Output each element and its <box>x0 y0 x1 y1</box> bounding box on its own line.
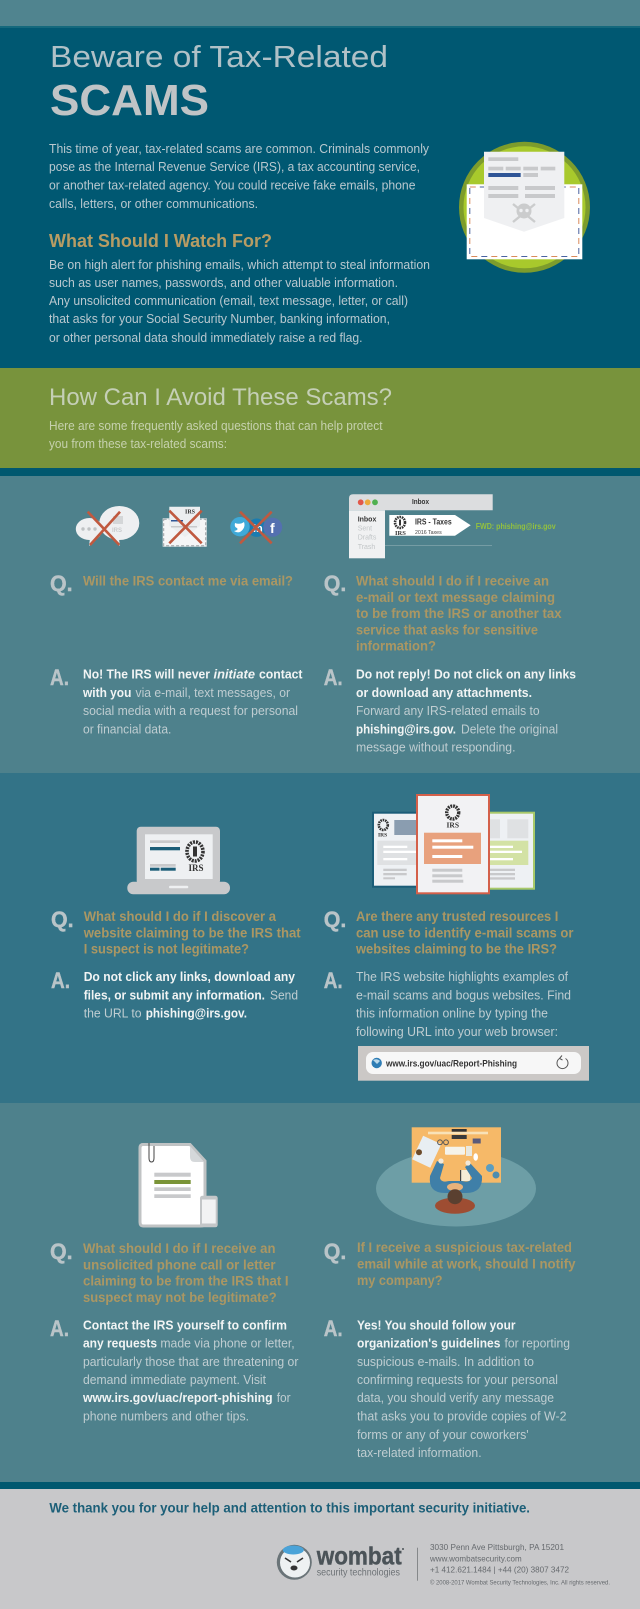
answer 6 <box>357 1318 570 1460</box>
icon: envelope with skull letter <box>459 142 590 273</box>
heading: what should I watch for: What Should I Watch For? <box>49 231 272 251</box>
icon: inbox window: Trash <box>358 544 375 551</box>
answer 1: No! The IRS will never <box>83 668 210 682</box>
answer 3: Do not click any links, download any <box>84 970 295 984</box>
panel: how can I avoid <box>0 368 640 468</box>
question 5: claiming to be from the IRS that I <box>83 1274 289 1288</box>
subheading text: you from these tax-related scams: <box>49 437 227 451</box>
icon: three website documents: IRS <box>378 833 387 839</box>
icon: crossed-out speech bubbles <box>76 506 139 546</box>
panel: footer <box>0 1489 640 1609</box>
icon: crossed-out envelope: IRS <box>185 510 196 516</box>
dark divider band <box>0 468 640 476</box>
answer 6: Yes! You should follow your <box>357 1318 516 1332</box>
answer mark 4: A. <box>324 968 343 993</box>
title <box>50 39 388 125</box>
question 2: What should I do if I receive an <box>356 574 549 588</box>
question 4: can use to identify e-mail scams or <box>356 926 574 940</box>
contact details: +1 412.621.1484 | +44 (20) 3807 3472 <box>430 1565 569 1575</box>
answer 1: via e-mail, text messages, or <box>136 686 290 700</box>
icon: document with paperclip and phone <box>140 1143 218 1227</box>
icon: inbox window: Inbox <box>412 497 430 506</box>
question 4: websites claiming to be the IRS? <box>355 942 557 956</box>
answer 3: Send <box>270 988 298 1002</box>
subheading text <box>49 419 383 451</box>
watch-for text: such as user names, passwords, and other valuable information. <box>49 276 398 290</box>
question 2: information? <box>356 638 436 654</box>
contact details: www.wombatsecurity.com <box>429 1553 522 1563</box>
dark divider band <box>0 1482 640 1489</box>
watch-for text: or other personal data should immediately raise a red flag. <box>49 331 362 345</box>
question 1: Will the IRS contact me via email? <box>83 574 293 588</box>
question 5: What should I do if I receive an <box>83 1241 276 1256</box>
intro text: pose as the Internal Revenue Service (IRS), a tax accounting service, <box>49 160 420 174</box>
icon: crossed-out social media <box>230 512 282 543</box>
question mark 3: Q. <box>51 907 74 932</box>
answer 3: phishing@irs.gov. <box>146 1006 247 1020</box>
watch-for text: that asks for your Social Security Number, banking information, <box>49 312 390 326</box>
answer 5: made via phone or letter, <box>160 1336 295 1350</box>
answer mark 6: A. <box>324 1316 343 1341</box>
icon: person working at desk <box>376 1127 536 1226</box>
watch-for text <box>49 258 430 345</box>
question 6: If I receive a suspicious tax-related <box>357 1240 572 1255</box>
top band <box>0 0 640 26</box>
icon: three website documents: IRS <box>446 821 459 830</box>
answer 4: following URL into your web browser: <box>356 1025 558 1039</box>
icon: inbox window: Sent <box>358 526 372 532</box>
answer 1: contact <box>259 668 303 682</box>
question mark 1: Q. <box>50 571 73 596</box>
title: Beware of Tax-Related <box>50 39 388 74</box>
icon: inbox window: Inbox <box>358 516 376 524</box>
answer 5: particularly those that are threatening or <box>83 1355 298 1369</box>
answer 4 <box>356 970 571 1039</box>
intro text: calls, letters, or other communications. <box>49 197 258 211</box>
question 5: suspect may not be legitimate? <box>83 1290 277 1305</box>
intro text: or another tax-related agency. You could receive fake emails, phone <box>49 178 416 192</box>
question mark 6: Q. <box>324 1239 346 1264</box>
answer 6: suspicious e-mails. In addition to <box>357 1355 534 1369</box>
icon: crossed-out social media: in <box>253 523 263 535</box>
question 5: unsolicited phone call or letter <box>83 1258 276 1272</box>
heading: how can I avoid these scams: How Can I Avoid These Scams? <box>49 384 392 411</box>
icon: laptop with IRS site <box>127 827 230 894</box>
answer mark 3: A. <box>51 968 70 993</box>
title: SCAMS <box>50 76 209 125</box>
answer 2: Do not reply! Do not click on any links <box>356 668 576 682</box>
watch-for text: Any unsolicited communication (email, text message, letter, or call) <box>49 294 408 308</box>
answer 1: initiate <box>214 668 255 682</box>
question 3: website claiming to be the IRS that <box>83 926 301 940</box>
answer 4: this information online by typing the <box>356 1006 548 1020</box>
icon: three website documents <box>373 795 534 893</box>
question 6: my company? <box>357 1273 442 1288</box>
icon: crossed-out envelope <box>163 507 207 547</box>
answer 2: phishing@irs.gov. <box>356 722 456 736</box>
answer 2: message without responding. <box>356 740 516 754</box>
answer 5: any requests <box>83 1336 157 1350</box>
question 2: service that asks for sensitive <box>356 622 538 638</box>
watch-for text: Be on high alert for phishing emails, which attempt to steal information <box>49 258 430 272</box>
answer 4: The IRS website highlights examples of <box>356 970 568 984</box>
answer 6: confirming requests for your personal <box>357 1373 558 1387</box>
answer 5: for <box>277 1391 291 1405</box>
icon: inbox window: IRS - Taxes <box>415 517 452 526</box>
icon: inbox window: FWD: phishing@irs.gov <box>476 521 556 531</box>
logo: wombat security technologies: wombat <box>316 1542 402 1570</box>
answer mark 2: A. <box>324 665 343 690</box>
question 4: Are there any trusted resources I <box>356 909 558 924</box>
browser URL bar <box>358 1046 589 1081</box>
answer 1 <box>82 668 303 736</box>
logo: wombat security technologies: security technologies <box>317 1568 400 1578</box>
answer 2: or download any attachments. <box>356 686 532 700</box>
icon: crossed-out speech bubbles: IRS <box>112 528 122 534</box>
answer 2 <box>356 668 576 754</box>
question 4 <box>355 909 574 956</box>
intro text <box>49 142 430 211</box>
question 6: email while at work, should I notify <box>357 1256 576 1272</box>
answer 1: with you <box>82 686 131 700</box>
question 2: to be from the IRS or another tax <box>356 606 562 621</box>
icon: crossed-out social media: f <box>270 520 275 536</box>
answer 5 <box>82 1318 298 1424</box>
question 3 <box>83 909 301 956</box>
answer 6: for reporting <box>504 1336 570 1350</box>
answer 3: files, or submit any information. <box>84 988 265 1002</box>
answer 5: demand immediate payment. Visit <box>83 1373 267 1387</box>
icon: inbox window <box>349 494 556 558</box>
icon: inbox window: IRS <box>395 530 406 537</box>
contact details: 3030 Penn Ave Pittsburgh, PA 15201 <box>430 1542 564 1552</box>
question 2: e-mail or text message claiming <box>356 590 555 605</box>
icon: inbox window: Drafts <box>358 534 377 542</box>
answer 6: tax-related information. <box>357 1446 482 1460</box>
question 3: I suspect is not legitimate? <box>84 942 249 956</box>
panel: FAQ row 2 <box>0 773 640 1103</box>
contact details: © 2008-2017 Wombat Security Technologies, Inc. All rights reserved. <box>430 1579 610 1586</box>
panel: FAQ row 3 <box>0 1103 640 1482</box>
icon: inbox window: 2016 Taxes <box>415 530 442 536</box>
question 6 <box>357 1240 576 1288</box>
answer 6: data, you should verify any message <box>357 1391 554 1405</box>
answer 4: e-mail scams and bogus websites. Find <box>356 988 571 1002</box>
browser URL bar: www.irs.gov/uac/Report-Phishing <box>385 1058 517 1070</box>
question 2 <box>356 574 562 654</box>
answer 1: or financial data. <box>83 722 171 736</box>
answer 5: Contact the IRS yourself to confirm <box>83 1318 287 1332</box>
thank-you message: We thank you for your help and attention to this important security initiative. <box>49 1500 530 1516</box>
question 5 <box>83 1241 289 1305</box>
question mark 2: Q. <box>324 571 346 596</box>
logo: wombat security technologies <box>277 1542 404 1580</box>
answer 2: Delete the original <box>461 722 558 736</box>
answer 6: forms or any of your coworkers' <box>357 1428 529 1442</box>
intro text: This time of year, tax-related scams are common. Criminals commonly <box>49 142 430 156</box>
answer 6: that asks you to provide copies of W-2 <box>357 1410 567 1424</box>
answer 6: organization's guidelines <box>357 1336 500 1350</box>
answer 5: phone numbers and other tips. <box>83 1410 249 1424</box>
icon: laptop with IRS site: IRS <box>188 863 204 873</box>
answer 3: the URL to <box>84 1006 142 1020</box>
panel: FAQ row 1 <box>0 476 640 773</box>
question mark 4: Q. <box>324 907 346 932</box>
answer 1: social media with a request for personal <box>83 704 298 718</box>
answer mark 1: A. <box>50 665 69 690</box>
subheading text: Here are some frequently asked questions that can help protect <box>49 419 383 433</box>
panel: intro <box>0 26 640 368</box>
answer 3 <box>84 970 298 1020</box>
answer mark 5: A. <box>50 1316 69 1341</box>
question mark 5: Q. <box>50 1239 73 1264</box>
question 3: What should I do if I discover a <box>84 909 276 924</box>
contact details <box>429 1542 610 1586</box>
answer 5: www.irs.gov/uac/report-phishing <box>82 1391 273 1405</box>
answer 2: Forward any IRS-related emails to <box>356 704 540 718</box>
